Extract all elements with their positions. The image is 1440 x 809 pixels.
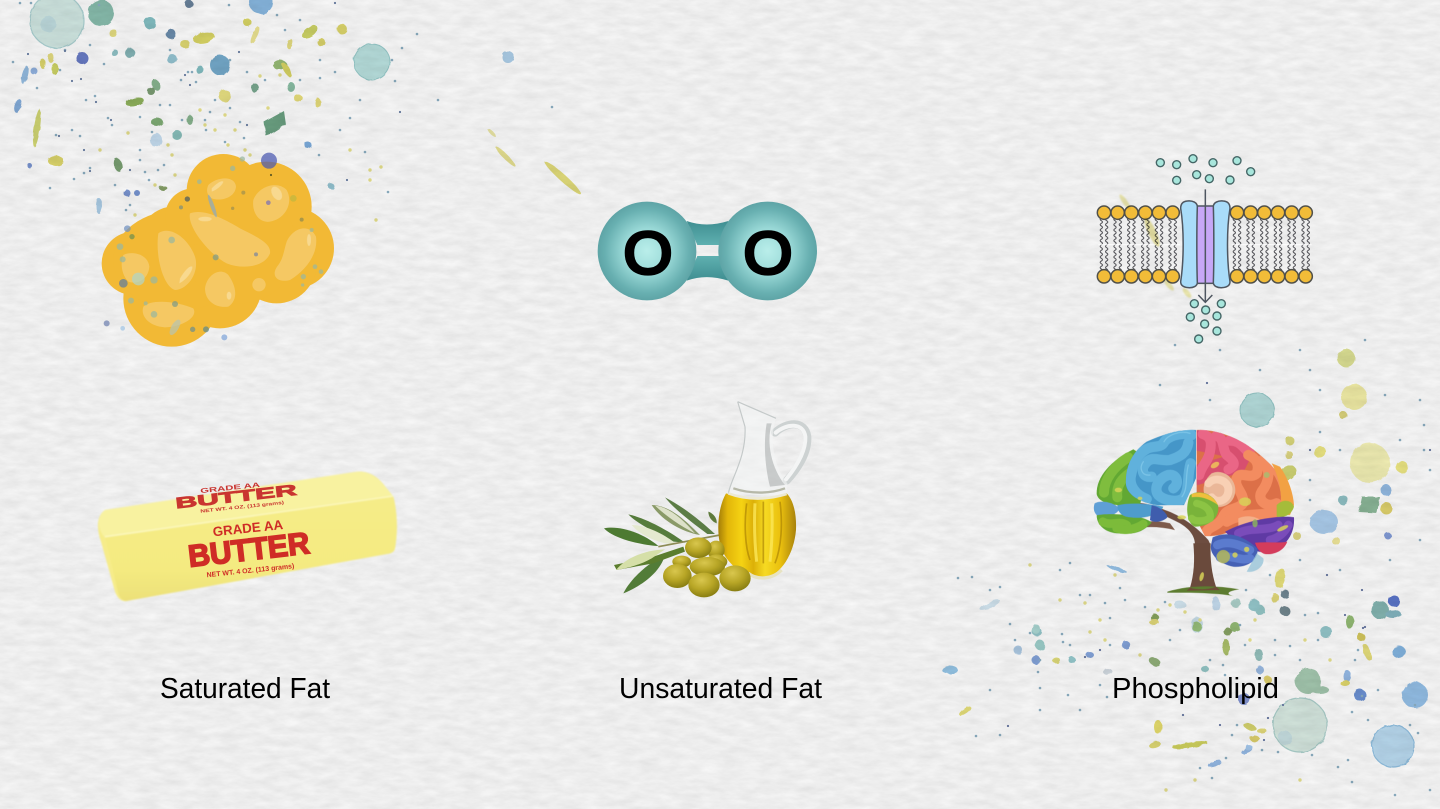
warm lobes xyxy=(1187,430,1294,536)
icon: olive oil jug and olives xyxy=(604,402,807,597)
top label: NET WT. 4 OZ. (113 grams) xyxy=(200,501,284,514)
channel protein xyxy=(1181,201,1230,288)
front label: GRADE AA xyxy=(212,517,284,539)
double bond xyxy=(687,221,728,281)
icon: butter stick xyxy=(98,472,397,601)
watercolor splatter: top left xyxy=(13,0,583,220)
lipid tails xyxy=(1098,213,1312,277)
front label: BUTTER xyxy=(186,527,311,574)
front label: NET WT. 4 OZ. (113 grams) xyxy=(206,563,295,579)
glass handle xyxy=(775,424,807,481)
jug glass xyxy=(728,402,787,496)
purple and blue lower lobes xyxy=(1211,517,1294,572)
paint speckles on brain xyxy=(1115,460,1289,582)
blue lobe xyxy=(1126,430,1196,505)
paint speckles on globule xyxy=(104,153,323,340)
leaves xyxy=(604,497,720,593)
left lobes xyxy=(1094,449,1167,534)
icon: oxygen molecule: O xyxy=(624,220,672,286)
icon: fat globule xyxy=(102,153,334,347)
molecules xyxy=(1156,155,1255,343)
label: saturated fat: Saturated Fat xyxy=(160,673,330,705)
icon: oxygen molecule xyxy=(598,202,817,300)
butter body xyxy=(98,472,397,601)
label: phospholipid: Phospholipid xyxy=(1112,673,1279,705)
watercolor splatter: lower right xyxy=(942,340,1430,795)
icon: cell membrane with phospholipid bilayer xyxy=(1097,155,1312,343)
top label: BUTTER xyxy=(175,481,298,512)
label: unsaturated fat: Unsaturated Fat xyxy=(619,673,822,705)
olives xyxy=(663,537,751,597)
arrow xyxy=(1198,189,1212,302)
icon: clay brain tree xyxy=(1094,430,1294,596)
lipid heads xyxy=(1097,206,1312,283)
top label: GRADE AA xyxy=(200,481,261,495)
oil xyxy=(718,493,796,579)
trunk and roots xyxy=(1120,503,1239,596)
icon: pale yellow stroke behind membrane xyxy=(1118,193,1193,299)
icon: oxygen molecule: O xyxy=(744,220,792,286)
